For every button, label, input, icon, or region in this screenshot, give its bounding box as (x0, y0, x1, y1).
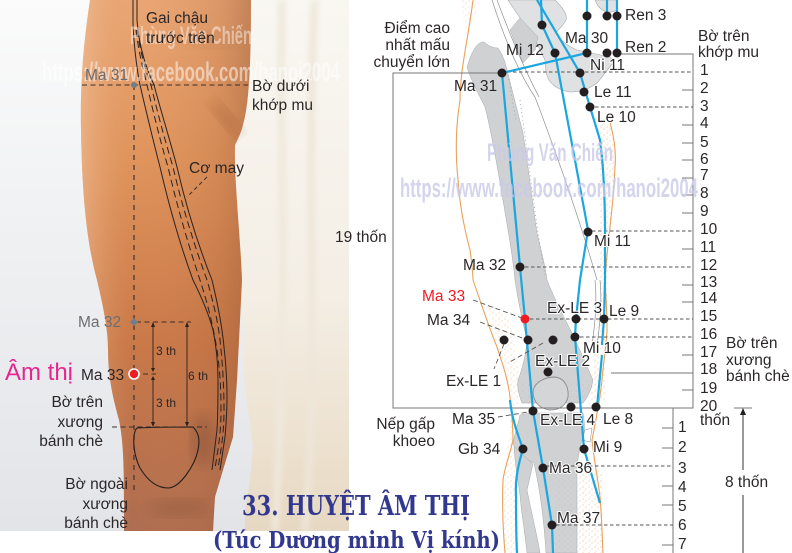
scale numbers 1-20: 15 (700, 308, 717, 325)
stipple shading (590, 120, 615, 400)
sartorius muscle outline (133, 0, 227, 470)
scale numbers 1-20: 18 (700, 361, 717, 378)
label: Âm thị: Âm thị (5, 359, 73, 386)
scale ticks (611, 90, 693, 545)
acupoint labels: Ma 35 (452, 411, 495, 428)
acupoint labels: Gb 34 (458, 441, 501, 458)
marker: Ma 31 (131, 82, 137, 88)
scale numbers 1-7: 6 (678, 517, 687, 534)
label: Cơ may: Cơ may (189, 160, 244, 177)
acupoint labels: Ma 33 (422, 288, 465, 305)
label: Bờ dưới khớp mu: khớp mu (252, 97, 313, 114)
label: Gai chậu trước trên: Gai chậu (146, 10, 208, 27)
scale numbers 1-20 (700, 62, 718, 415)
label: Nếp gấp khoeo: Nếp gấp (376, 416, 435, 433)
hatch (582, 428, 592, 442)
scale numbers 1-20: 13 (700, 274, 717, 291)
scale numbers 1-20: 1 (700, 62, 709, 79)
panel: anatomical diagram (393, 0, 752, 553)
label: Bờ dưới khớp mu: Bờ dưới (252, 78, 309, 95)
scale numbers 1-20: 6 (700, 151, 709, 168)
label: Bờ trên xương bánh chè photo: bánh chè (39, 433, 103, 450)
label: Ma 33 photo: Ma 33 (81, 367, 124, 384)
scale numbers 1-20: 16 (700, 326, 717, 343)
label: Bờ ngoài xương bánh chè: xương (82, 496, 128, 513)
label: Bờ trên khớp mu: khớp mu (698, 44, 759, 61)
label: 19 thốn: 19 thốn (335, 229, 387, 246)
label: Ma 32 photo: Ma 32 (78, 314, 121, 331)
photo watermark (42, 22, 340, 87)
label: 3 th upper: 3 th (156, 344, 176, 358)
patella outline (134, 427, 199, 488)
scale numbers 1-7: 2 (678, 439, 687, 456)
photo watermark: Phùng Văn Chiến (130, 22, 252, 50)
label: Bờ trên xương bánh chè diagram: Bờ trên (726, 335, 778, 352)
acupoint labels: Le 8 (603, 411, 633, 428)
vertical reference line (133, 85, 135, 495)
marker: Ma 33 (129, 369, 139, 379)
label: Bờ trên xương bánh chè diagram: bánh chè (726, 368, 790, 385)
scale numbers 1-20: 11 (700, 239, 716, 256)
diagram watermark (400, 139, 698, 203)
acupoint labels: Le 9 (609, 303, 639, 320)
scale numbers 1-20: 14 (700, 290, 718, 307)
acupoint labels: Le 11 (594, 84, 632, 101)
acupoint labels: Mi 12 (506, 42, 544, 59)
acupoint labels: Ma 36 (549, 460, 592, 477)
cloth drape (235, 0, 349, 531)
scale numbers 1-20: 19 (700, 380, 717, 397)
scale numbers 1-20: 17 (700, 344, 717, 361)
measurement frame (393, 54, 752, 553)
acupoint labels: Mi 10 (583, 340, 621, 357)
scale numbers 1-7: 5 (678, 498, 687, 515)
acupoint labels: Ex-LE 2 (535, 353, 590, 370)
diagram watermark: Phùng Văn Chiến (487, 139, 613, 167)
acupoint labels: Ma 31 (454, 78, 497, 95)
acupoint labels (422, 7, 666, 527)
label: Điểm cao nhất mấu chuyển lớn: Điểm cao (385, 20, 450, 37)
acupoint labels: Ex-LE 3 (547, 300, 602, 317)
title: 33. HUYỆT ÂM THỊ (242, 489, 470, 522)
leader: Cơ may (187, 177, 207, 197)
scale numbers 1-20: 4 (700, 115, 709, 132)
acupoint labels: Le 10 (597, 109, 636, 126)
label: Bờ trên xương bánh chè diagram: xương (726, 352, 772, 369)
acupoint labels: Ma 37 (557, 510, 600, 527)
scale numbers 1-20: 8 (700, 185, 709, 202)
scale numbers 1-20: 7 (700, 167, 709, 184)
dashed level lines (507, 72, 693, 525)
acupoint labels: Ni 11 (590, 57, 625, 74)
thin muscle lines (492, 0, 601, 345)
label: Bờ trên xương bánh chè photo: xương (57, 414, 103, 431)
femur (467, 42, 593, 403)
scale numbers 1-20: 2 (700, 80, 709, 97)
acupoint labels: Ma 34 (427, 312, 470, 329)
label: 8 thốn: 8 thốn (725, 474, 768, 491)
scale numbers 1-20: 10 (700, 221, 718, 238)
horizontal reference lines (82, 85, 248, 427)
acupoint dots (498, 12, 622, 530)
label: 6 th: 6 th (188, 369, 208, 383)
acupoint labels: Ex-LE 4 (540, 412, 596, 429)
fibula (514, 446, 540, 553)
acupoint labels: Ren 2 (625, 39, 666, 56)
label: Bờ ngoài xương bánh chè: bánh chè (64, 515, 128, 532)
marker: Ma 33 diagram (520, 314, 530, 324)
acupoint labels: Mi 9 (593, 439, 622, 456)
scale numbers 1-20: 12 (700, 257, 717, 274)
acupoint labels: Ma 32 (463, 257, 506, 274)
label: thốn: thốn (700, 412, 730, 429)
label: Bờ trên xương bánh chè photo: Bờ trên (51, 394, 103, 411)
tibia (513, 413, 584, 553)
label: Điểm cao nhất mấu chuyển lớn: chuyển lớn (373, 54, 450, 71)
scale numbers 1-7: 3 (678, 460, 687, 477)
label: Ma 31 photo: Ma 31 (85, 67, 128, 84)
scale numbers 1-7: 4 (678, 479, 687, 496)
label: Nếp gấp khoeo: khoeo (393, 433, 435, 450)
label: Gai chậu trước trên: trước trên (146, 30, 215, 47)
marker: Ma 32 (130, 318, 138, 326)
photo watermark: https://www.facebook.com/hanoi2004 (42, 57, 340, 87)
measuring arrows (151, 322, 189, 427)
scale numbers 1-20: 3 (700, 98, 709, 115)
arrow: 8 thốn span (740, 408, 746, 553)
leader lines (473, 300, 543, 417)
body contour (456, 0, 615, 553)
label: Bờ trên khớp mu: Bờ trên (698, 28, 750, 45)
scale numbers 1-7 (678, 419, 687, 553)
scale numbers 1-20: 9 (700, 203, 709, 220)
scale numbers 1-7: 1 (678, 419, 687, 436)
acupoint labels: Mi 11 (594, 233, 631, 250)
scale numbers 1-20: 20 (700, 398, 718, 415)
label: Bờ ngoài xương bánh chè: Bờ ngoài (65, 476, 128, 493)
scale numbers 1-20: 5 (700, 134, 709, 151)
leg (81, 0, 251, 531)
scale numbers 1-7: 7 (678, 536, 687, 553)
ilium fragment (510, 18, 538, 63)
acupoint labels: Ren 3 (625, 7, 666, 24)
patella (533, 377, 568, 410)
meridian lines (502, 0, 617, 553)
pelvis (508, 0, 617, 92)
label: 3 th lower: 3 th (156, 396, 176, 410)
label: Điểm cao nhất mấu chuyển lớn: nhất mấu (385, 37, 450, 54)
acupoint labels: Ex-LE 1 (446, 373, 501, 390)
acupoint labels: Ma 30 (565, 30, 608, 47)
panel: thigh photo (0, 0, 349, 531)
